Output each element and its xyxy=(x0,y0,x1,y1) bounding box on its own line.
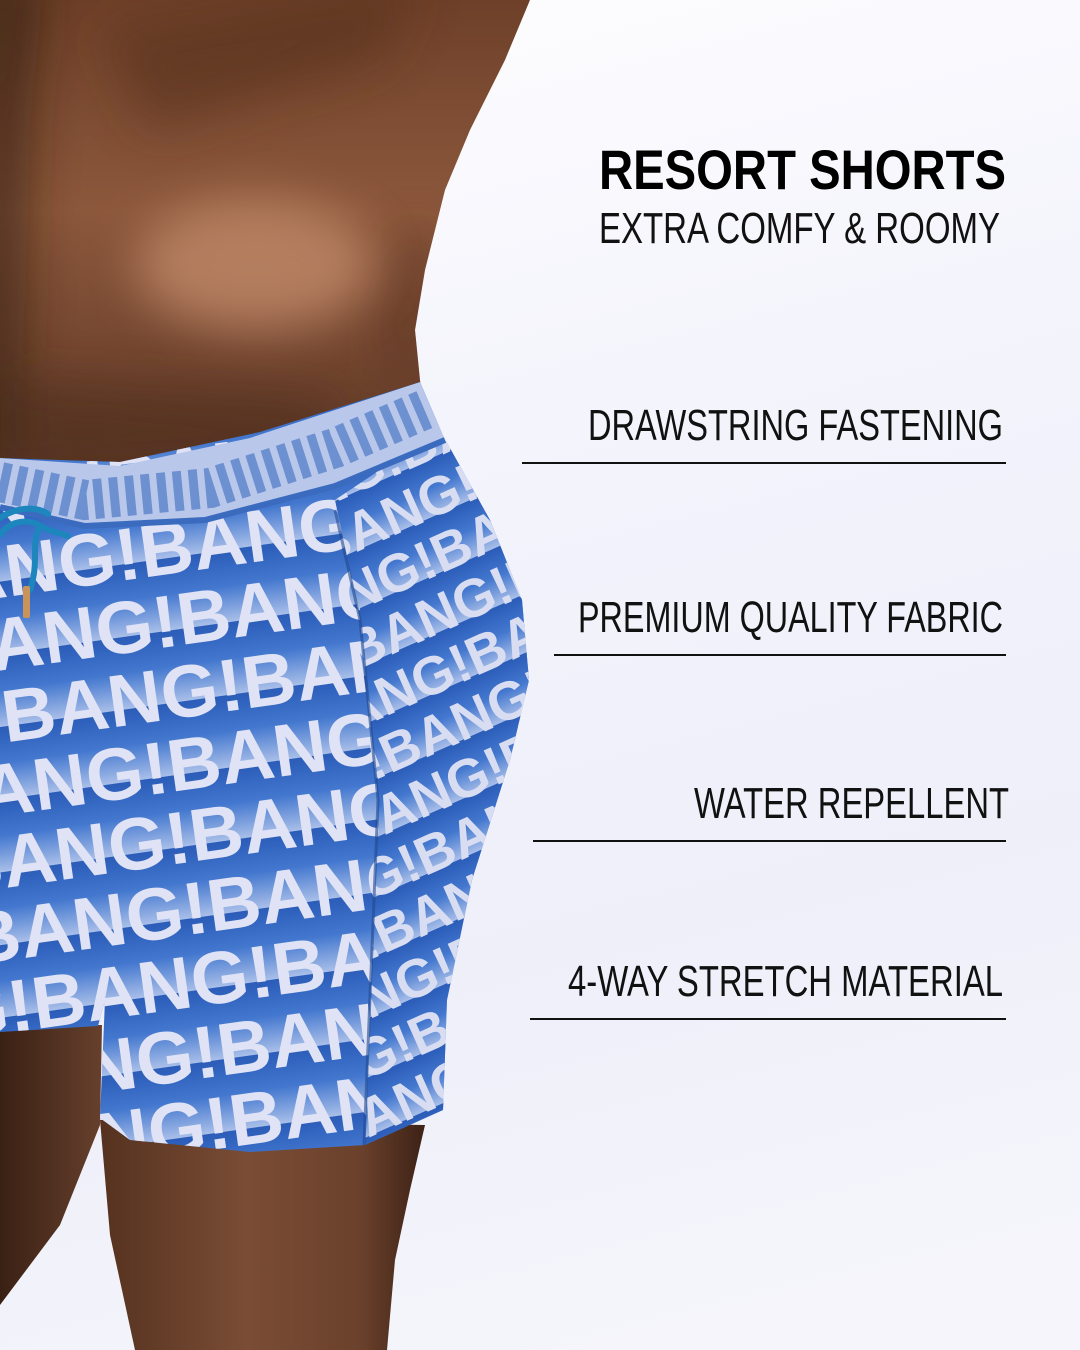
side panel print: BANG!BANG!BANG!BANG! xyxy=(98,386,769,729)
side panel print: NG!BANG!BANG!BANG! xyxy=(223,894,823,1205)
side panel print: BANG!BANG!BANG!BANG! xyxy=(237,797,908,1140)
BANG! text print, front panel xyxy=(0,442,528,1149)
side panel print xyxy=(335,435,529,1145)
BANG! text print, front panel: BANG!BANG!BANG!BANG! xyxy=(21,1047,994,1264)
waistband xyxy=(0,382,445,525)
BANG! text print, front panel: BANG!BANG!BANG!BANG! xyxy=(0,908,944,1125)
torso xyxy=(0,0,530,480)
left leg xyxy=(0,1025,102,1305)
title: RESORT SHORTS xyxy=(599,138,1006,201)
side panel print: NG!BANG!BANG!BANG! xyxy=(84,483,683,794)
side panel print: BANG!BANG!BANG!BANG! xyxy=(63,283,734,626)
side panel print: BANG!BANG!BANG!BANG! xyxy=(133,489,804,831)
shorts with BANG! print xyxy=(0,382,529,1152)
right leg xyxy=(100,1120,425,1350)
side panel print: BANG!BANG!BANG!BANG! xyxy=(29,180,700,523)
skin highlight xyxy=(135,200,375,330)
side panel print: NG!BANG!BANG!BANG! xyxy=(153,689,753,1000)
side panel print: BANG!BANG!BANG!BANG! xyxy=(202,694,874,1037)
side seam xyxy=(335,510,378,1145)
icon: drawstring xyxy=(0,509,68,618)
side panel print: NG!BANG!BANG!BANG! xyxy=(14,278,614,589)
abdomen shading xyxy=(0,0,430,480)
side panel print: BANG!BANG!BANG!BANG! xyxy=(168,591,839,934)
side panel print: NG!BANG!BANG!BANG! xyxy=(49,380,649,691)
side panel print: NG!BANG!BANG!BANG! xyxy=(118,586,718,897)
figure: model torso and legs xyxy=(0,0,530,1350)
side panel print: BANG!BANG!BANG!BANG! xyxy=(272,900,943,1242)
side panel print: NG!BANG!BANG!BANG! xyxy=(188,791,788,1102)
